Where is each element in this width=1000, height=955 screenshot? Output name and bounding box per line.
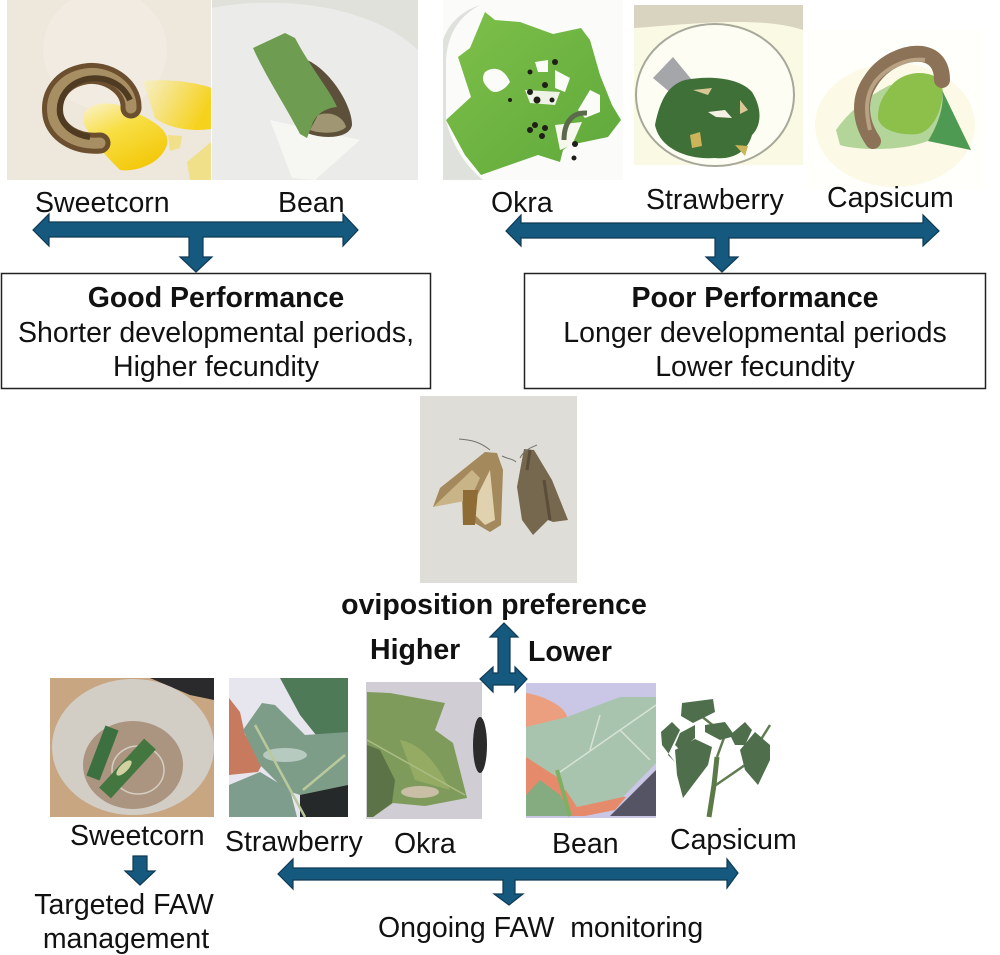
heading: good performance: Good Performance <box>88 282 344 314</box>
photo: larva in bean leaf <box>212 0 418 180</box>
photo: strawberry leaf in petri dish <box>634 5 803 166</box>
label: Capsicum top: Capsicum <box>827 182 954 214</box>
label: Bean top: Bean <box>278 187 345 219</box>
arrow: good performance branch <box>33 214 358 272</box>
photo: adult moths <box>420 396 577 583</box>
text: targeted FAW management <box>34 889 214 955</box>
photo: larva on capsicum <box>805 30 985 190</box>
photo: sweetcorn in bowl <box>50 678 214 817</box>
label: Strawberry top: Strawberry <box>646 184 785 216</box>
label: Okra top: Okra <box>491 187 553 219</box>
label: Okra bottom: Okra <box>394 828 456 860</box>
photo: larva on okra leaf <box>443 0 623 180</box>
text: targeted FAW management: management <box>43 923 209 955</box>
heading: oviposition preference: oviposition preference <box>341 589 647 621</box>
photo: capsicum plant <box>661 699 770 817</box>
text: ongoing FAW monitoring: Ongoing FAW monitoring <box>378 912 703 944</box>
photo: strawberry leaf with eggs <box>229 678 348 817</box>
arrow: poor performance branch <box>506 215 939 272</box>
arrow: ongoing monitoring branch <box>278 859 738 905</box>
panel: good performance <box>2 274 430 388</box>
label: Sweetcorn top: Sweetcorn <box>35 187 170 219</box>
label: Bean bottom: Bean <box>552 828 619 860</box>
panel: poor performance <box>524 274 986 388</box>
text: targeted FAW management: Targeted FAW <box>34 889 214 921</box>
label: Sweetcorn bottom: Sweetcorn <box>70 820 205 852</box>
heading: poor performance: Poor Performance <box>631 282 879 314</box>
text: good performance detail 2: Higher fecundity <box>113 351 320 383</box>
text: poor performance detail 1: Longer developmental periods <box>563 317 947 349</box>
label: Strawberry bottom: Strawberry <box>225 826 364 858</box>
label: Lower: Lower <box>528 636 612 668</box>
text: poor performance detail 2: Lower fecundity <box>655 351 856 383</box>
arrow: preference direction <box>480 623 527 692</box>
photo: bean leaf <box>526 683 656 818</box>
label: Capsicum bottom: Capsicum <box>670 824 797 856</box>
photo: okra leaf with eggs <box>366 682 487 819</box>
text: good performance detail 1: Shorter developmental periods, <box>18 317 414 349</box>
label: Higher: Higher <box>370 634 460 666</box>
photo: larva on sweetcorn <box>7 0 211 180</box>
arrow: sweetcorn to targeted management <box>125 856 155 885</box>
